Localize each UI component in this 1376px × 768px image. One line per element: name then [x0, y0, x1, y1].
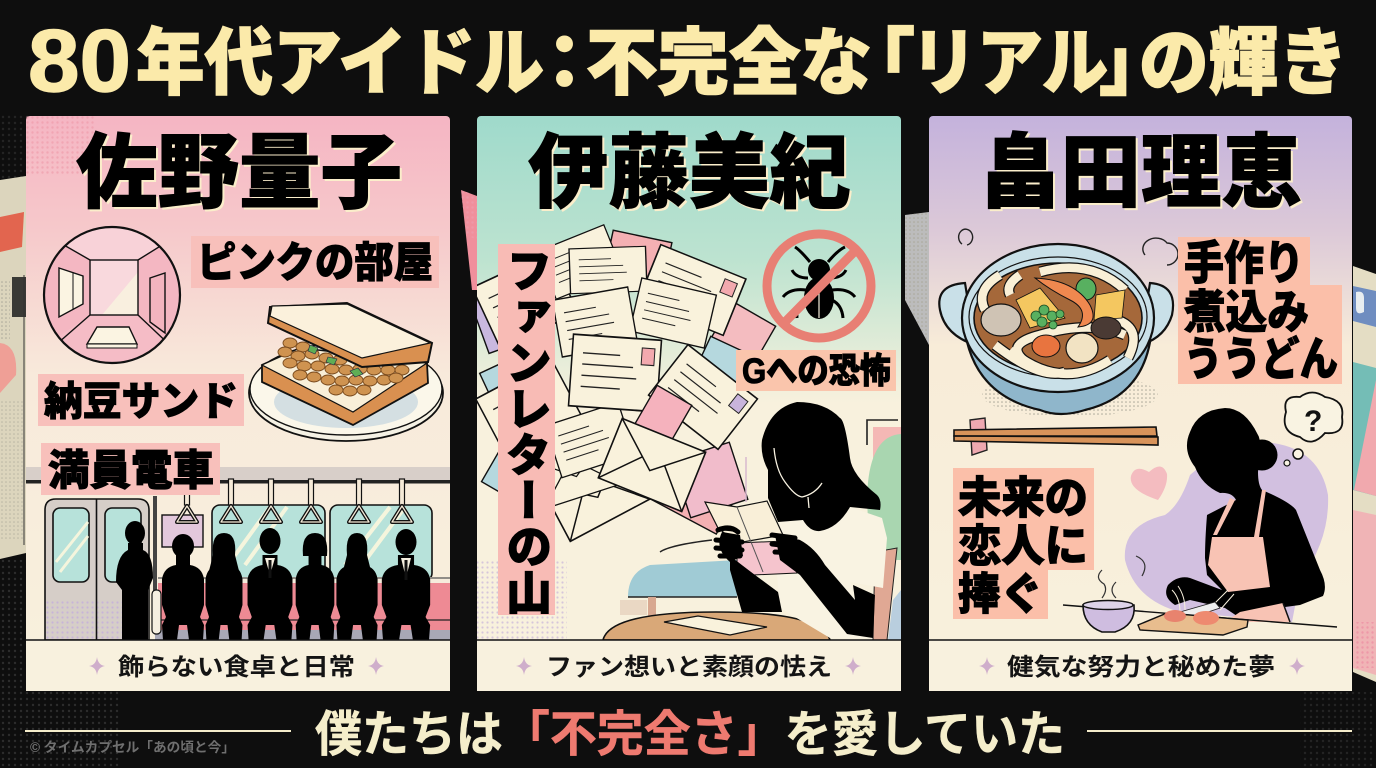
title — [28, 11, 1348, 110]
title: 」 — [1099, 23, 1172, 104]
train door — [45, 499, 149, 640]
icon: no cockroach — [767, 234, 871, 338]
icon: bowl and cutting board — [1063, 556, 1337, 635]
credit: © タイムカプセル「あの頃と今」 — [30, 739, 235, 755]
label: 満員電車: 満員電車 — [48, 447, 214, 494]
icon: heart — [1131, 466, 1167, 500]
train scene — [26, 467, 450, 640]
label: 未来の恋人に捧ぐ: 捧ぐ — [958, 570, 1043, 619]
silhouettes: passengers — [116, 521, 430, 640]
panel: 伊藤美紀 — [469, 116, 901, 691]
heading: 佐野量子: 佐野量子 — [76, 128, 402, 219]
label: 納豆サンド: 納豆サンド — [44, 380, 238, 424]
title: の輝き — [1139, 23, 1348, 104]
udon noodles — [982, 268, 1134, 374]
label: 未来の恋人に捧ぐ: 未来の — [958, 474, 1088, 523]
icon: natto sandwich — [249, 303, 443, 441]
straps — [177, 479, 412, 522]
room background — [603, 420, 901, 640]
caption bar: 飾らない食卓と日常 — [118, 654, 355, 681]
caption bar — [929, 640, 1352, 691]
title: リアル — [911, 23, 1108, 104]
heading: 佐野量子: 佐野量子 — [78, 130, 404, 221]
heading: 伊藤美紀: 伊藤美紀 — [528, 129, 850, 219]
footer message: 僕たちは「不完全さ」を愛していた — [315, 708, 1065, 762]
title: 「 — [842, 23, 915, 104]
caption bar: 健気な努力と秘めた夢 — [1007, 654, 1275, 681]
newspaper: centre right — [905, 212, 929, 345]
icon: nabe udon pot — [939, 229, 1178, 417]
newspaper: centre left — [461, 190, 477, 290]
silhouette: woman reading letter — [705, 402, 887, 638]
heading: 畠田理恵: 畠田理恵 — [982, 131, 1304, 221]
icon: pink room — [40, 227, 185, 370]
pile of fan letters — [469, 225, 776, 541]
label: ピンクの部屋: ピンクの部屋 — [197, 239, 433, 286]
label: 未来の恋人に捧ぐ — [953, 468, 1094, 619]
caption bar — [477, 640, 901, 691]
label: ファンレターの山: ファンレターの山 — [500, 247, 552, 615]
title: 不完全な — [586, 23, 872, 104]
label: 手作り煮込みうどん: ううどん — [1184, 333, 1338, 385]
icon: chopsticks — [954, 418, 1158, 455]
panel: 畠田理恵 — [929, 116, 1352, 691]
label: 未来の恋人に捧ぐ: 恋人に — [958, 522, 1088, 571]
label: 手作り煮込みうどん — [1178, 237, 1342, 385]
label: 手作り煮込みうどん: 手作り — [1184, 237, 1304, 289]
icon: thought bubble: ? — [1304, 405, 1322, 438]
background blob — [1125, 443, 1328, 622]
caption bar — [26, 640, 450, 691]
label: Gへの恐怖: Gへの恐怖 — [742, 352, 891, 391]
icon: thought bubble — [1284, 392, 1342, 466]
panel: 佐野量子 — [26, 116, 450, 691]
heading: 畠田理恵: 畠田理恵 — [980, 129, 1302, 219]
silhouette: woman cooking — [1166, 408, 1325, 622]
title: 年代アイドル — [136, 23, 544, 104]
heading: 伊藤美紀: 伊藤美紀 — [530, 131, 852, 221]
newspaper: left — [0, 176, 26, 559]
title: ： — [528, 23, 601, 104]
caption bar: ファン想いと素顔の怯え — [546, 654, 832, 681]
label: 手作り煮込みうどん: 煮込み — [1184, 286, 1309, 338]
newspaper: right — [1353, 266, 1376, 682]
title: 80 — [28, 11, 131, 110]
